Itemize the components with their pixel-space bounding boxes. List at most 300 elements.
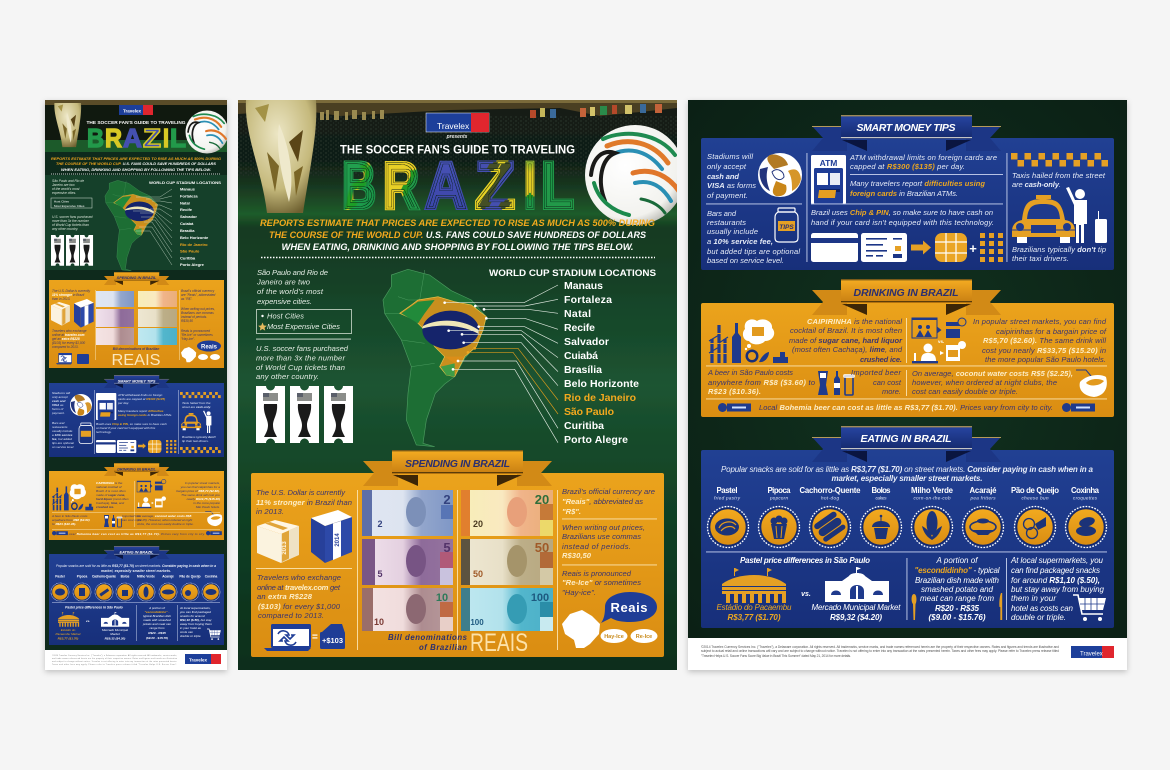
banknote: 50 reais: 50: [473, 569, 483, 579]
snack names: Bolos: [872, 486, 891, 495]
vs label: vs.: [801, 591, 811, 598]
list: host cities: [564, 280, 639, 446]
snack translations: croquettes: [1073, 496, 1098, 500]
thumbnail panel: drinking: DRINKING IN BRAZIL: [117, 468, 156, 472]
thumbnail panel: spending: are "Reais", abbreviated: [181, 293, 216, 297]
icon: Pacaembu stadium: [722, 568, 786, 603]
icons: market vs hotel drinks: vs.: [938, 339, 944, 344]
thumbnail: stadium heading and cities: Salvador: [180, 214, 197, 219]
list: host cities: São Paulo: [564, 406, 614, 418]
thumbnail panel: spending: instead of periods.: [181, 315, 207, 319]
text: taxi tips: Brazilians typically don't tip: [1012, 245, 1106, 254]
snack names: Pipoca: [768, 486, 791, 495]
heading: pastel price differences: Pastel price differences in São Paulo: [740, 556, 870, 565]
text: imported beer: can cost: [873, 378, 902, 387]
thumbnail panel: spending: Bill denominations of Brazilian: [113, 347, 159, 351]
thumbnail: tickets: [51, 235, 93, 266]
thumbnail: intro text: WHEN EATING, DRINKING AND SHOPPING BY FOLLOWING THE TIPS BELOW.: [61, 168, 211, 172]
text: escondidinho: Brazilian dish made with: [915, 576, 1000, 585]
text: pronunciation: [562, 569, 641, 597]
icon: cheese bun: [1014, 506, 1056, 548]
text: street market prices: caipirinhas for a bargain price of: [996, 327, 1107, 336]
thumbnail panel: eating: away from buying them: [180, 622, 212, 626]
thumbnail panel: eating: Milho Verde: [137, 574, 155, 578]
BRAZIL wordmark: B: [342, 148, 376, 222]
arrow: to chip: [911, 240, 931, 254]
heading: stadium locations: WORLD CUP STADIUM LOCATIONS: [489, 268, 656, 279]
thumbnail panel: smart money: cash and: [52, 399, 66, 403]
BRAZIL wordmark: L: [541, 148, 574, 222]
panel: eating in Brazil: [701, 426, 1114, 628]
note: most expensive cities: [256, 268, 328, 306]
note: most expensive cities: expensive cities.: [257, 297, 312, 306]
ribbon: spending: [363, 450, 552, 486]
text: taxis cash-only: are cash-only.: [1012, 180, 1061, 189]
text: supermarkets: [1010, 556, 1105, 622]
snack names: Pastel: [716, 486, 738, 495]
text: exchange online: online at travelex.com get: [257, 583, 341, 592]
text: stadium payments: [707, 152, 756, 200]
icon: laptop equals plus $103: +$103: [322, 636, 343, 645]
thumbnail: BRAZIL wordmark: I: [163, 123, 169, 153]
thumbnail panel: drinking: On average, coconut water costs R$5: [137, 514, 192, 518]
text: supermarkets: them in your: [1011, 594, 1056, 603]
thumbnail: left notes: U.S. soccer fans purchased: [52, 215, 93, 219]
banknote: 100 reais: 100: [531, 592, 549, 604]
thumbnail: footer legal text: and subject to change without notice. Travelex is not offering to enter into any transaction at the rates presented herein.: [52, 660, 178, 663]
icon: corn: [912, 506, 952, 548]
thumbnail panel: smart money: a 10% service: [52, 433, 73, 437]
text: ATM limits: Many travelers report difficulties using: [850, 179, 985, 188]
thumbnail: stadium heading and cities: Natal: [180, 200, 190, 206]
thumbnail panel: spending: The U.S. Dollar is currently: [52, 289, 90, 293]
thumbnail panel: smart money: tips are optional: [52, 441, 74, 445]
thumbnail panel: spending: Brazilians use commas: [181, 311, 214, 315]
thumbnail panel: drinking: to R$23 ($10.36).: [52, 522, 76, 526]
thumbnail panel: smart money: VISA as: [52, 403, 64, 407]
thumbnail: legend: Most Expensive Cities: [54, 204, 85, 208]
thumbnail panel: smart money: usually include: [52, 429, 73, 433]
icon: tips jar: [775, 208, 798, 242]
thumbnail: stadium heading and cities: Cuiabá: [180, 221, 194, 226]
snack names: Acarajé: [970, 486, 997, 495]
text: beer prices: anywhere from R$8 ($3.60) to: [708, 378, 815, 387]
icon: shopping cart: [1073, 595, 1106, 621]
label: Mercado Municipal price: [812, 603, 901, 622]
thumbnail panel: eating: costs can: [180, 630, 193, 634]
photo: World Cup trophy: [246, 100, 316, 213]
intro text: [260, 218, 656, 253]
thumbnail panel: spending: Reais is pronounced: [181, 329, 210, 333]
icon: ATM: ATM: [820, 158, 837, 168]
thumbnail: footer legal text: [52, 654, 178, 666]
icon: bolos: [860, 506, 902, 548]
icon: card back: [861, 233, 907, 262]
thumbnail panel: smart money: [49, 375, 224, 457]
stadium roof with flags: [238, 100, 677, 120]
icon: taxi: [1012, 195, 1075, 243]
ribbon: drinking: [812, 279, 1001, 315]
BRAZIL wordmark: R: [383, 148, 419, 222]
text: dollar strength: 11% stronger in Brazil than: [256, 498, 352, 507]
BRAZIL wordmark: A: [425, 148, 467, 222]
snack translations: popcorn: [769, 496, 788, 500]
list: host cities: Belo Horizonte: [564, 378, 639, 390]
text: coconut water: however, when ordered at night clubs, the: [912, 378, 1057, 387]
text: commas instead of periods: R$30,50: [562, 551, 592, 560]
thumbnail panel: eating: double or triple.: [180, 634, 201, 638]
title: THE SOCCER FAN'S GUIDE TO TRAVELING: [340, 142, 575, 156]
presents label: presents: [446, 134, 468, 140]
thumbnail panel: eating: R$20 - R$35: [148, 631, 166, 635]
icon: coxinha: [1066, 506, 1106, 548]
thumbnail panel: smart money: Taxis hailed from the: [182, 401, 211, 405]
list: host cities: Curitiba: [564, 420, 604, 432]
text: imported beer: more.: [882, 387, 901, 396]
banknote: 50 reais: 50: [535, 540, 549, 555]
text: street market prices: [973, 317, 1107, 364]
note: ticket sales: [256, 344, 349, 381]
label: Mercado Municipal price: R$9,32 ($4.20): [830, 613, 882, 622]
thumbnail panel: eating: Estádio do: [61, 628, 76, 632]
banknote: 2 reais: [362, 490, 453, 536]
ribbon heading: drinking: DRINKING IN BRAZIL: [854, 287, 958, 299]
note: most expensive cities: Janeiro are two: [256, 278, 310, 286]
text: taxi tips: [1012, 245, 1106, 263]
pattern: taxi checker: [1011, 153, 1108, 166]
thumbnail: BRAZIL wordmark: L: [170, 123, 186, 153]
text: ATM limits: ATM withdrawal limits on foreign cards are: [849, 153, 997, 162]
text: coconut water: cost can easily double or triple.: [912, 387, 1018, 396]
thumbnail panel: drinking: made of sugar cane,: [96, 493, 125, 497]
poster: main infographic page two: [688, 100, 1127, 670]
icon: municipal market: [825, 567, 889, 602]
text: official currency: Brazil's official currency are: [562, 487, 655, 496]
thumbnail: stadium heading and cities: Curitiba: [180, 256, 196, 260]
thumbnail panel: eating: R$3,77 ($1.70): [58, 636, 78, 640]
map legend: [256, 310, 352, 334]
thumbnail panel: drinking: crushed ice.: [96, 505, 114, 509]
thumbnail panel: drinking: hard liquor (most often: [96, 497, 129, 501]
thumbnail panel: drinking: anywhere from R$8 ($3.60): [52, 518, 90, 522]
thumbnail panel: drinking: A beer in São Paulo costs: [51, 514, 88, 518]
text: official currency: "Reais", abbreviated as: [562, 497, 643, 506]
thumbnail: BRAZIL wordmark: Z: [143, 123, 161, 153]
thumbnail panel: drinking: [49, 463, 224, 540]
icon: fork: [912, 594, 916, 620]
snack translations: [714, 496, 1098, 500]
snack names: Milho Verde: [911, 486, 954, 495]
text: supermarkets: double or triple.: [1011, 613, 1066, 622]
snack translations: cheese bun: [1022, 496, 1049, 500]
snack translations: hot-dog: [821, 496, 839, 500]
banknote: 10 reais: 10: [436, 592, 448, 604]
text: chip and PIN: [811, 208, 994, 227]
thumbnail: left notes: more than 3x the number: [52, 219, 90, 223]
thumbnail panel: eating: you can find packaged: [179, 610, 211, 614]
ribbon heading: eating: EATING IN BRAZIL: [860, 433, 952, 445]
thumbnail panel: smart money: on hand if your card isn't equipped with this: [96, 426, 156, 430]
thumbnail panel: spending: [49, 272, 224, 369]
thumbnail panel: spending: get an extra R$228: [52, 337, 80, 341]
thumbnail: left notes: any other country.: [52, 227, 78, 231]
thumbnail panel: smart money: Many travelers report difficulties: [118, 409, 164, 413]
text: caipirinha: cocktail of Brazil. It is most often: [790, 326, 902, 335]
snack translations: corn-on-the-cob: [914, 496, 951, 500]
banknote: 5 reais: [362, 539, 453, 585]
thumbnail panel: spending: ($103) for every $1,000: [52, 341, 85, 345]
text: commas instead of periods: instead of periods.: [562, 542, 631, 551]
text: stadium payments: cash and: [707, 172, 739, 181]
icon: acaraje: [962, 506, 1004, 548]
icon: laptop equals plus $103: =: [312, 632, 318, 643]
label: Mercado Municipal price: Mercado Municipal Market: [812, 603, 901, 612]
thumbnail panel: drinking: In popular street markets,: [185, 481, 220, 485]
thumbnail panel: eating: EATING IN BRAZIL: [120, 550, 154, 554]
thumbnail panel: smart money: fee, but added: [52, 437, 72, 441]
thumbnail panel: smart money: SMART MONEY TIPS: [118, 380, 156, 384]
icon: coconut: [1076, 370, 1107, 397]
icon: hot dog: [810, 506, 850, 548]
text: supermarkets: hotel as costs can: [1011, 604, 1074, 613]
text: chip and PIN: hand if your card isn't equipped with this technology.: [811, 218, 994, 227]
text: pronunciation: "Re-Ice" or sometimes: [562, 578, 641, 587]
thumbnail panel: smart money: payment.: [51, 411, 65, 415]
banknote: 20 reais: [461, 490, 553, 536]
BRAZIL wordmark: I: [524, 148, 536, 222]
thumbnail panel: eating: R$9,32 ($4.20): [105, 636, 125, 640]
caption: denominations of Reais: [388, 634, 467, 650]
ribbon: eating: [812, 426, 1001, 462]
thumbnail panel: drinking: in the more popular: [193, 501, 221, 505]
map: South America with Brazil flag: [383, 269, 486, 447]
banknote: 2 reais: 2: [443, 492, 451, 507]
thumbnail panel: smart money: Bars and: [52, 421, 65, 425]
text: chip and PIN: Brazil uses Chip & PIN, so make sure to have cash on: [811, 208, 993, 217]
thumbnail: left notes: expensive cities.: [52, 191, 76, 195]
thumbnail: stadium heading and cities: Porto Alegre: [180, 262, 205, 267]
label: Estadio do Pacaembu price: [716, 603, 792, 622]
thumbnail: BRAZIL wordmark: B: [87, 123, 104, 153]
footer legal text: [701, 645, 1059, 658]
thumbnail panel: eating: Pastel: [55, 574, 65, 578]
list: host cities: Fortaleza: [564, 294, 612, 306]
icon: 2014 cash stack: 2014: [335, 533, 341, 547]
thumbnail panel: drinking: you can find caipirinhas for a: [180, 485, 220, 489]
footer legal text: "Travelex Helps U.S. Soccer Fans Score Big Value in Brazil This Summer" dated May 21, 2014 for more details.: [701, 654, 851, 658]
icon: man hailing: [1066, 187, 1087, 243]
thumbnail panel: smart money: restaurants: [52, 425, 68, 429]
thumbnail: footer legal text: and trade names referenced herein are the property of their respective owners. Rates and figures and trends are illustrative: [52, 657, 177, 660]
banknote: 50 reais: [461, 539, 553, 585]
ribbon heading: smart money: SMART MONEY TIPS: [856, 122, 956, 134]
text: official currency: [562, 487, 655, 516]
list: host cities: Recife: [564, 322, 595, 334]
text: official currency: "R$".: [562, 507, 581, 516]
thumbnail panel: eating: Pastel price differences in São Paulo: [65, 606, 123, 610]
thumbnail: trophy: [54, 103, 81, 147]
panel: smart money tips: [701, 115, 1114, 270]
thumbnail panel: eating: Pipoca: [77, 574, 87, 578]
poster: main infographic page one: [238, 100, 685, 670]
text: pronunciation: Reais is pronounced: [562, 569, 632, 578]
thumbnail: BRAZIL wordmark: A: [123, 123, 142, 153]
text: service fee: [707, 209, 800, 265]
icon: white Brazil map: [562, 610, 600, 648]
text: stadium payments: Stadiums will: [707, 152, 753, 161]
text: beer prices: A beer in São Paulo costs: [707, 368, 793, 377]
intro text: WHEN EATING, DRINKING AND SHOPPING BY FOLLOWING THE TIPS BELOW.: [282, 242, 634, 253]
thumbnail: Travelex logo: [119, 105, 153, 115]
thumbnail panel: drinking: Local Bohemia beer can cost as little as R$3,77 ($1.70). Prices vary from city to city.: [67, 532, 205, 536]
icon: 2013 cash stack: 2013: [282, 541, 288, 555]
note: ticket sales: of World Cup tickets than: [256, 363, 345, 372]
text: escondidinho: meat can range from: [920, 594, 994, 603]
thumbnail panel: smart money: Stadiums will: [52, 391, 70, 395]
footer Travelex logo: [1071, 646, 1114, 658]
thumbnail: left notes: [51, 179, 93, 231]
text: caipirinha: CAIPIRINHA is the national: [807, 317, 902, 326]
thumbnail panel: drinking: national cocktail of: [96, 485, 123, 489]
thumbnail panel: smart money: on service level.: [52, 445, 74, 449]
text: dollar strength: in 2013.: [256, 507, 284, 516]
icons: caipirinha ingredients: [709, 319, 788, 363]
banknote: 100 reais: 100: [470, 618, 484, 627]
icon: pipoca: [758, 506, 800, 548]
banknote: 5 reais: 5: [377, 569, 383, 579]
text: taxis cash-only: Taxis hailed from the street: [1012, 171, 1106, 180]
thumbnail panel: spending: SPENDING IN BRAZIL: [117, 276, 157, 280]
icons: market vs hotel drinks: [912, 318, 966, 363]
text: ATM limits: capped at R$300 ($135) per day.: [850, 162, 965, 171]
thumbnail: stadium heading and cities: Brasília: [180, 228, 195, 233]
snack translations: fried pastry: [714, 496, 741, 500]
note: ticket sales: U.S. soccer fans purchased: [256, 344, 349, 353]
text: service fee: Bars and: [707, 209, 737, 218]
thumbnail: footer legal text: ©2014 Travelex Currency Services Inc. ("Travelex"), a Delaware corporation. All rights reserved. All trademarks, service marks,: [52, 654, 178, 657]
thumbnail panel: eating: market, especially smaller street markets.: [101, 569, 171, 573]
speech bubble: Reais: [601, 592, 657, 623]
text: imported beer: [851, 368, 902, 396]
text: caipirinha: crushed ice.: [860, 355, 902, 364]
logo: Bohemia right: [1062, 403, 1095, 412]
text: Bohemia beer: Local Bohemia beer can cost as little as R$3,77 ($1.70). Prices vary from city to city.: [759, 403, 1053, 412]
text: service fee: but added tips are optional: [707, 247, 800, 256]
thumbnail panel: drinking: nearly R$33,75 ($15.20): [187, 497, 220, 501]
thumbnail panel: drinking: clubs, the cost can easily double or triple.: [137, 522, 194, 526]
thumbnail panel: eating: Acarajé: [162, 574, 174, 578]
thumbnail: stadium heading and cities: Fortaleza: [180, 194, 198, 198]
text: beer prices: [707, 368, 815, 396]
thumbnail panel: smart money: using foreign cards in Brazilian ATMs.: [118, 413, 172, 417]
ribbon heading: spending: SPENDING IN BRAZIL: [405, 458, 510, 470]
thumbnail panel: eating: Bolos: [121, 574, 130, 578]
caption: denominations of Reais: of Brazilian: [419, 643, 467, 652]
icon: white soccer ball: [758, 153, 802, 197]
text: street market prices: In popular street markets, you can find: [973, 317, 1107, 326]
text: exchange online: [257, 573, 341, 620]
icon: keypad: [980, 233, 1003, 262]
text: exchange online: ($103) for every $1,000: [258, 602, 341, 611]
thumbnail: stadium heading and cities: [149, 180, 221, 267]
text: service fee: based on service level.: [707, 256, 784, 265]
text: street market prices: cost you nearly R$33,75 ($15.20) in: [982, 346, 1106, 355]
text: snack intro: Popular snacks are sold for as little as R$3,77 ($1.70) on street markets. Consider paying in cash when in a: [721, 465, 1094, 474]
speech bubble: Hay-Ice: Hay-Ice: [604, 634, 624, 640]
note: ticket sales: any other country.: [256, 372, 319, 381]
text: stadium payments: of payment.: [707, 191, 748, 200]
text: snack intro: [721, 465, 1094, 483]
thumbnail panel: smart money: forms of: [52, 407, 64, 411]
text: supermarkets: for around R$1,10 ($.50),: [1011, 576, 1100, 585]
text: supermarkets: but stay away from buying: [1011, 585, 1105, 594]
text: escondidinho: ($9.00 - $15.76): [928, 613, 986, 622]
snack translations: cakes: [876, 496, 887, 500]
thumbnail panel: spending: than in 2013.: [52, 297, 71, 301]
thumbnail: Travelex logo: Travelex: [123, 108, 142, 114]
list: host cities: Salvador: [564, 336, 609, 348]
thumbnail panel: smart money: only accept: [52, 395, 68, 399]
label: Estadio do Pacaembu price: Estádio do Pacaembu: [716, 603, 792, 612]
thumbnail panel: spending: "Re-Ice" or sometimes: [181, 333, 213, 337]
text: stadium payments: only accept: [707, 162, 747, 171]
icons: three tickets: [256, 386, 353, 443]
text: pronunciation: "Hay-ice".: [562, 588, 596, 597]
text: exchange online: Travelers who exchange: [257, 573, 341, 582]
thumbnail: intro text: REPORTS ESTIMATE THAT PRICES ARE EXPECTED TO RISE AS MUCH AS 500% DURING: [51, 157, 221, 161]
text: escondidinho: A portion of: [936, 556, 978, 565]
thumbnail panel: eating: R$1,10 ($.50), but stay: [180, 618, 212, 622]
text: commas instead of periods: When writing out prices,: [562, 523, 645, 532]
text: caipirinha: [789, 317, 903, 364]
list: host cities: Rio de Janeiro: [564, 392, 636, 404]
thumbnail panel: drinking: Cachaça), lime, and: [96, 501, 124, 505]
thumbnail: left notes: of World Cup tickets than: [52, 223, 89, 227]
thumbnail: BRAZIL wordmark: [87, 123, 186, 153]
thumbnail panel: eating: snacks for around: [180, 614, 205, 618]
text: escondidinho: smashed potato and: [921, 585, 994, 594]
text: service fee: a 10% service fee,: [707, 237, 773, 246]
text: escondidinho: [914, 556, 1000, 622]
thumbnail panel: smart money: technology.: [96, 430, 112, 434]
thumbnail: map: [105, 180, 158, 271]
icon: pastel: [708, 506, 748, 548]
snack names: [716, 486, 1100, 495]
thumbnail panel: eating: Market: [110, 632, 120, 636]
thumbnail: intro text: THE COURSE OF THE WORLD CUP. U.S. FANS COULD SAVE HUNDREDS OF DOLLARS: [56, 162, 216, 166]
text: imported beer: Imported beer: [851, 368, 902, 377]
text: exchange online: an extra R$228: [257, 592, 313, 601]
snack names: Pão de Queijo: [1011, 486, 1059, 495]
list: host cities: Natal: [564, 308, 591, 320]
intro text: REPORTS ESTIMATE THAT PRICES ARE EXPECTED TO RISE AS MUCH AS 500% DURING: [260, 218, 656, 229]
thumbnail panel: eating: in your hotel as: [180, 626, 201, 630]
thumbnail panel: smart money: cards are capped at R$300 ($135): [118, 397, 165, 401]
icon: 2013 cash stack: [257, 520, 299, 563]
thumbnail: legend: [51, 198, 92, 208]
label: Estadio do Pacaembu price: R$3,77 ($1.70): [728, 613, 781, 622]
thumbnail panel: smart money: Brazilians typically don't: [182, 435, 217, 439]
poster: full-length thumbnail infographic: [45, 100, 228, 670]
text: taxi tips: their taxi drivers.: [1012, 254, 1069, 263]
text: stadium payments: VISA as forms: [707, 181, 756, 190]
icons: beer glasses and bottle: [818, 371, 855, 395]
text: dollar strength: [256, 490, 352, 514]
text: taxis cash-only: [1012, 171, 1106, 189]
thumbnail: intro text: [51, 157, 221, 172]
footer Travelex logo: Travelex: [1080, 652, 1103, 658]
thumbnail: stadium heading and cities: Belo Horizonte: [180, 235, 209, 240]
